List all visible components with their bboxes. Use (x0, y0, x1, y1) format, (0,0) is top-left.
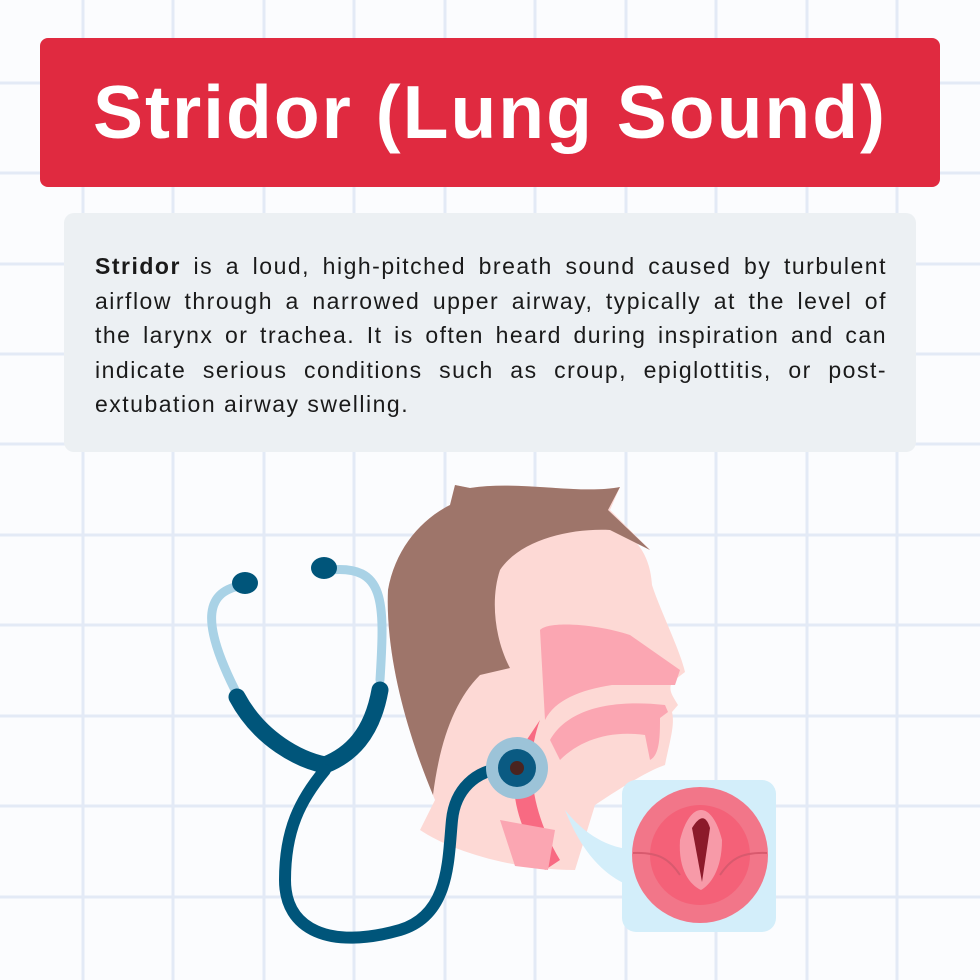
inset: vocal cords (565, 780, 776, 932)
head (388, 485, 685, 870)
earpieces (232, 557, 337, 594)
title banner: Stridor (Lung Sound) (93, 70, 887, 154)
stethoscope (212, 570, 505, 938)
description box: the larynx or trachea. It is often heard during inspiration and can (95, 322, 887, 348)
description box (64, 213, 916, 452)
title banner (40, 38, 940, 187)
description box: Stridor is a loud, high-pitched breath sound caused by turbulent (95, 253, 887, 279)
description box: airflow through a narrowed upper airway, typically at the level of (95, 288, 887, 314)
description box: indicate serious conditions such as croup, epiglottitis, or post- (95, 356, 887, 382)
chest piece (486, 737, 548, 799)
description box: extubation airway swelling. (95, 391, 409, 417)
